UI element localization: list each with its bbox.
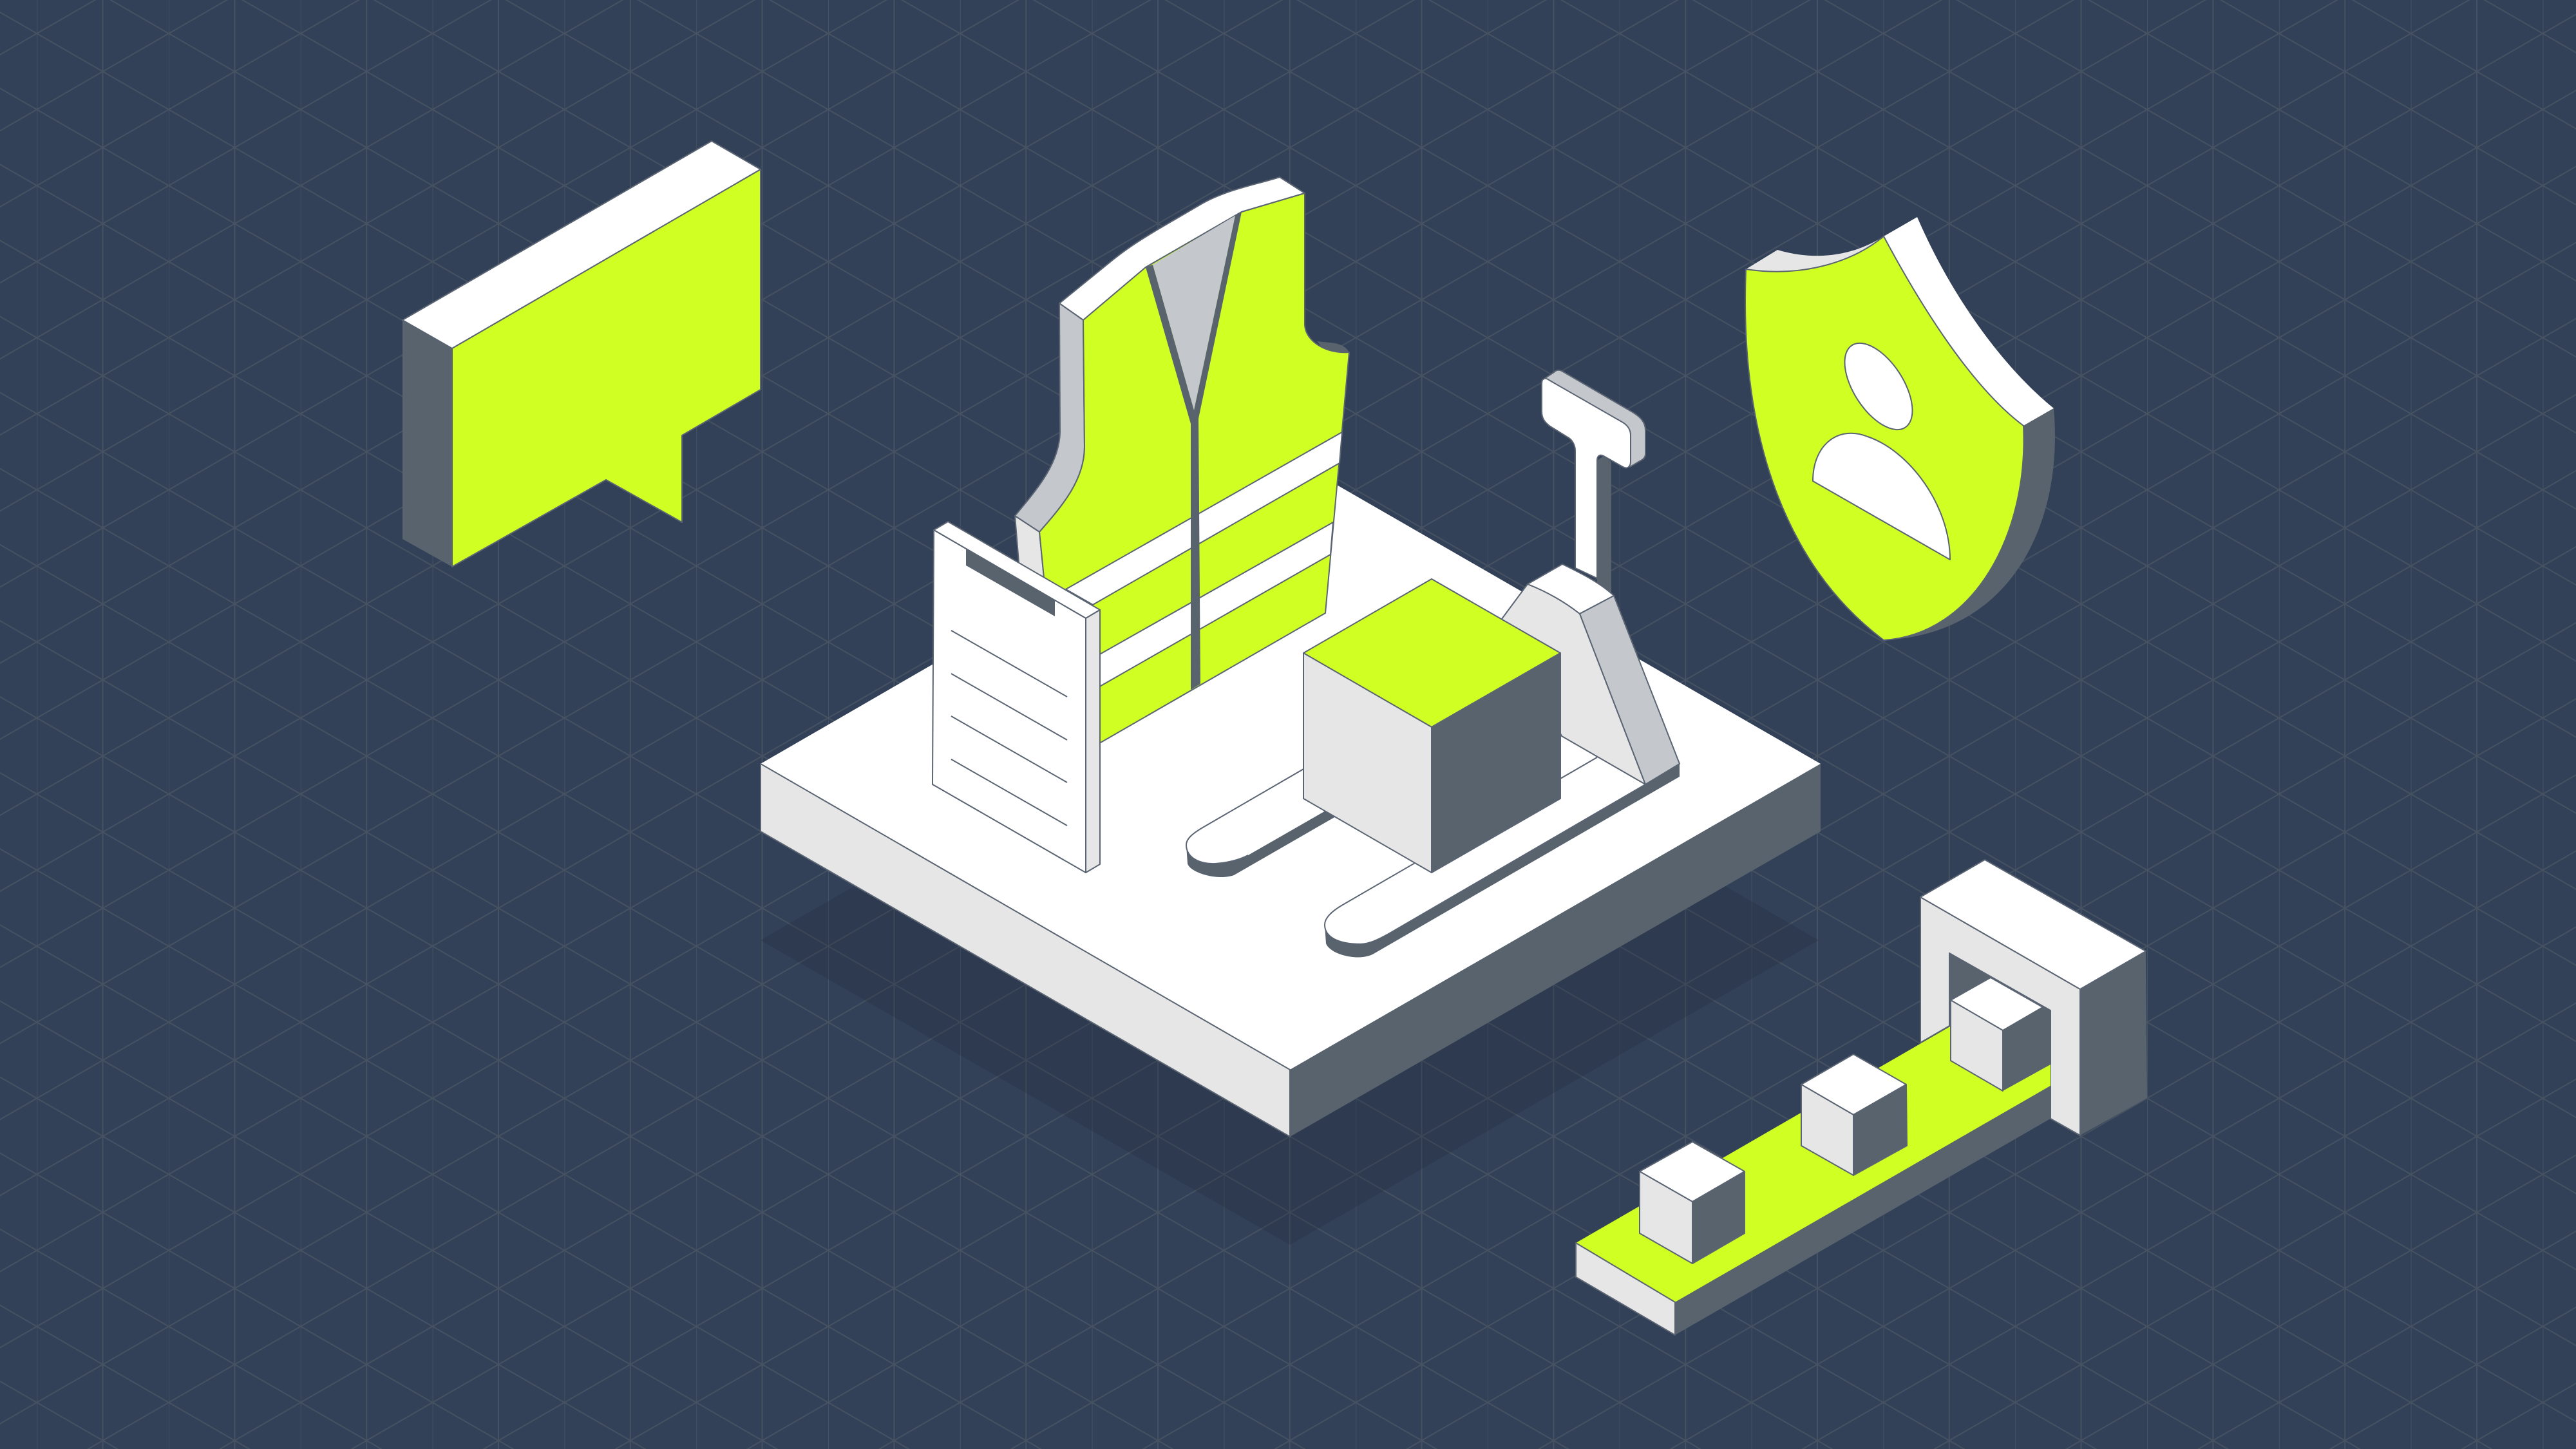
truck handle <box>1542 370 1645 596</box>
person shoulders <box>1813 433 1950 560</box>
vest armhole inner edge <box>1317 341 1349 353</box>
left fork <box>1186 741 1352 877</box>
clipboard text lines <box>951 630 1067 826</box>
icon: speech bubble <box>402 141 761 567</box>
truck body <box>1502 564 1680 784</box>
cargo box <box>1303 579 1560 873</box>
vest zipper and collar trim <box>1146 212 1242 690</box>
icon: clipboard document <box>933 522 1100 873</box>
icon: safety vest <box>1015 177 1349 750</box>
vest front <box>1039 193 1349 750</box>
parcel in arch <box>1951 978 2050 1091</box>
arch body <box>2080 951 2147 1135</box>
parcel front <box>1640 1142 1745 1264</box>
icon: shield with person <box>1745 217 2055 640</box>
platform shadow <box>761 634 1819 1245</box>
icon: conveyor belt with scanner arch <box>1576 860 2147 1335</box>
vest shoulder top <box>1059 177 1305 320</box>
vest left edge <box>1015 303 1084 532</box>
vest lower left lining <box>1015 516 1044 578</box>
conveyor belt <box>1576 1027 2050 1302</box>
vest neck opening <box>1153 216 1235 410</box>
arch inner opening <box>1949 953 2050 1065</box>
person head <box>1831 332 1926 441</box>
icon: pallet truck <box>1186 370 1680 957</box>
shield face <box>1745 236 2024 640</box>
panel: isometric platform <box>761 458 1821 1137</box>
clipboard clip <box>966 549 1055 616</box>
right fork <box>1325 757 1680 957</box>
vest reflective stripe upper <box>1066 432 1342 605</box>
vest reflective stripe lower <box>1088 522 1333 693</box>
parcel middle <box>1801 1054 1907 1175</box>
